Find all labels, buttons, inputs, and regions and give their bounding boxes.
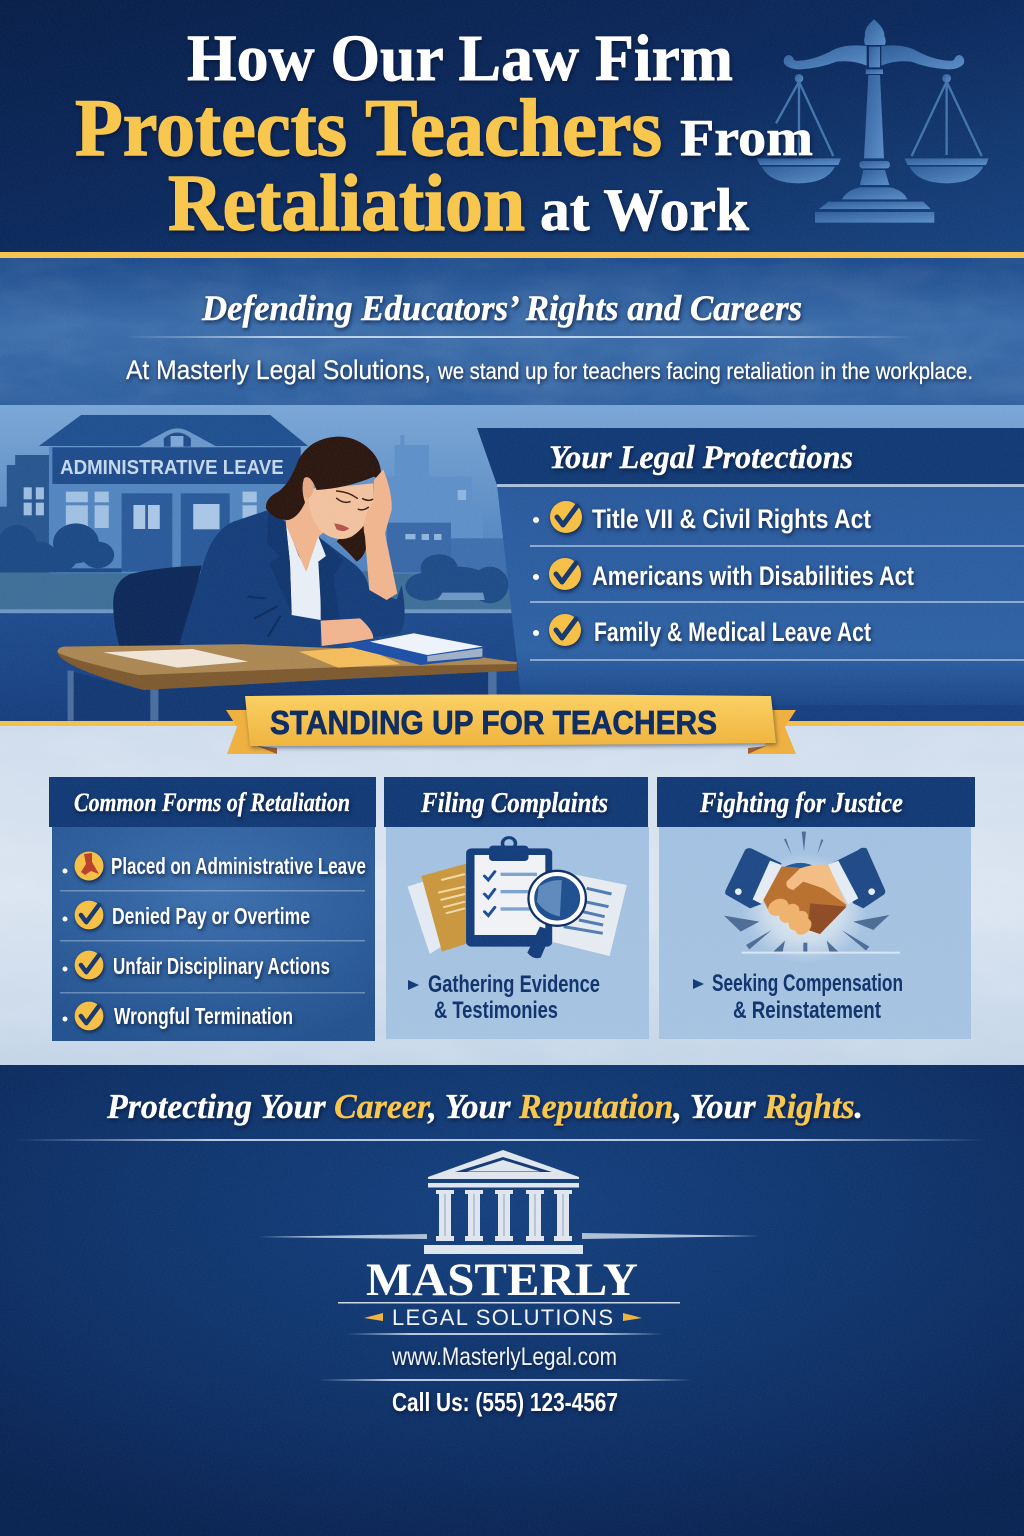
text: gathering evidence: & Testimonies [434,997,558,1024]
phone: Call Us: (555) 123-4567 [392,1387,618,1417]
chair [113,566,202,648]
under desk [73,672,497,720]
panel header [49,777,376,827]
panel heading: Fighting for Justice [699,788,903,819]
bullet arrow [408,980,419,990]
panel: common forms of retaliation [49,777,376,1041]
banner tails [226,710,277,754]
protection 1: Title VII & Civil Rights Act [592,504,871,534]
paper on desk [103,649,248,668]
eyes and mouth [337,491,373,510]
protection 3: Family & Medical Leave Act [594,617,871,647]
sign: administrative leave: ADMINISTRATIVE LEAVE [60,456,284,479]
panel: your legal protections [477,428,1024,661]
panel body [386,827,649,1039]
illustration: desk [57,633,517,721]
desk legs [68,671,497,721]
jacket folds [248,597,280,636]
check icon 3 [549,614,581,646]
background: header [0,0,1024,254]
check icon [75,951,103,979]
protections heading: Your Legal Protections [549,440,853,476]
title line 3 end: at Work [540,177,750,243]
logo name: MASTERLY [366,1254,638,1306]
text: seeking compensation [712,970,903,1024]
logo temple [424,1150,583,1254]
panel heading: Filing Complaints [420,788,608,819]
lapels [267,511,292,613]
ear [302,476,314,498]
shirt [286,522,326,620]
panel header [384,777,648,827]
title line 2 highlight: Protects Teachers [75,82,662,173]
panel heading: Common Forms of Retaliation [74,788,350,817]
heading: defending educators: Defending Educators’ Rights and Careers [201,288,802,328]
tagline: Protecting Your Career, Your Reputation, Your Rights. [106,1087,863,1126]
hair back [337,518,367,562]
ground strip [0,572,574,613]
panel body [659,827,971,1039]
school building [49,447,301,573]
figure: teacher with head in hand [179,437,405,652]
website: www.MasterlyLegal.com [391,1343,617,1371]
check icon 1 [550,501,582,533]
background sky [0,405,1024,572]
right building [387,523,451,573]
title line 2 end: From [680,110,813,167]
background: light section [0,722,1024,1067]
face [308,483,374,539]
left bushes [0,523,114,572]
item 2: Denied Pay or Overtime [112,903,310,929]
hair [266,437,381,520]
roof [39,415,308,446]
protections header [477,428,1024,485]
jacket [179,510,405,652]
panel: filing complaints [384,777,649,1039]
banner: standing up for teachers [226,694,796,754]
panel: legal protections body [497,485,1024,705]
left wing [0,455,49,572]
gold divider line [0,721,1024,726]
text: seeking compensation: & Reinstatement [733,997,881,1024]
text: gathering evidence [428,971,600,1024]
gable [137,428,218,447]
icon: scales of justice [757,19,989,223]
gold header line [0,252,1024,258]
illustration: school background with chair [0,405,1024,722]
right skyline [385,435,500,573]
item 3: Unfair Disciplinary Actions [113,953,330,979]
icon: handshake [724,832,900,963]
check icon 2 [549,558,581,590]
icon: alert badge [74,852,104,880]
desk edge [57,652,517,690]
intro text: At Masterly Legal Solutions, [126,355,431,385]
text: gathering evidence: Gathering Evidence [428,971,600,998]
title [75,22,813,248]
title line 3 highlight: Retaliation [168,160,525,248]
sign: administrative leave [52,447,301,484]
raised arm and hand [364,469,397,600]
doors [122,493,230,572]
logo subtitle: LEGAL SOLUTIONS [392,1305,613,1330]
band: intro background [0,258,1024,405]
background: footer [0,1065,1024,1536]
lower ground [0,613,1024,722]
right bushes [405,554,508,603]
item 1: Placed on Administrative Leave [111,853,366,879]
panel header [657,777,975,827]
text: seeking compensation: Seeking Compensation [712,970,903,997]
check icon [75,1002,103,1030]
panel: fighting for justice [657,777,975,1039]
desk top [57,644,517,675]
protection 2: Americans with Disabilities Act [592,561,914,591]
item 4: Wrongful Termination [114,1003,293,1029]
check icon [75,901,103,929]
logo: masterly legal solutions [258,1150,760,1417]
neck [285,490,327,572]
title line 1: How Our Law Firm [187,22,733,95]
banner ribbon [245,694,776,746]
banner text: STANDING UP FOR TEACHERS [270,704,717,741]
folder on desk [299,647,400,668]
windows [66,492,257,528]
binder [341,633,484,665]
icon: clipboard and magnifier [408,838,627,958]
panel body [52,827,375,1041]
bullet arrow [693,979,704,989]
resting hand [321,618,373,646]
